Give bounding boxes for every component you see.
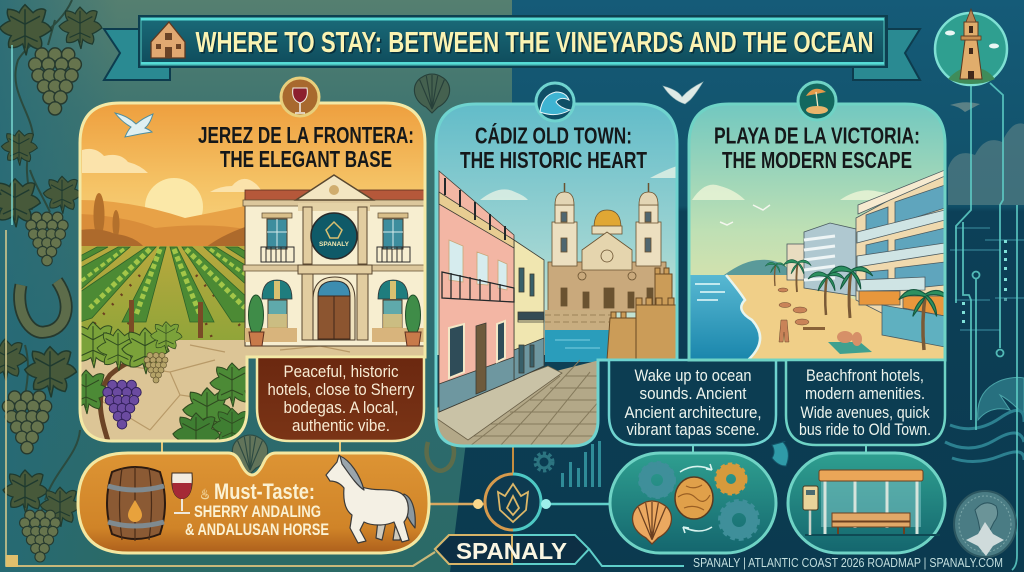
panel: Jerez de la Frontera: [64, 78, 425, 459]
icon: house: [151, 22, 185, 58]
illustration: cathedral and street: [436, 104, 677, 450]
panel: Cadiz Old Town: [436, 83, 776, 450]
text box: bus ride to Old Town.: [799, 420, 931, 439]
brand badge: [413, 535, 684, 566]
hotel building: [243, 175, 425, 346]
beachgoers: [778, 288, 809, 342]
text box: [257, 357, 424, 441]
must-taste text: Must-Taste:: [214, 479, 315, 504]
icon: arrows: [680, 464, 712, 533]
text box: [786, 360, 945, 445]
heading: [714, 122, 920, 173]
icon: beach umbrella: [798, 82, 836, 120]
decorative horseshoe bottom: [427, 442, 454, 471]
panel outline: [436, 104, 677, 446]
heading: [198, 122, 414, 172]
background: ocean side: [450, 0, 1024, 572]
panel outline: [689, 104, 945, 360]
must-taste text: & ANDALUSAN HORSE: [185, 520, 329, 539]
icon: gull: [115, 113, 153, 137]
decorative shell top: [414, 74, 450, 113]
panel outline: [80, 103, 425, 441]
title banner: [104, 15, 920, 80]
cloud band: [948, 123, 1024, 205]
decorative shell bottom: [232, 435, 268, 474]
panel: bus stop: [788, 453, 945, 553]
text box: vibrant tapas scene.: [626, 420, 760, 439]
ribbon tails: [104, 29, 920, 80]
decorative gull top: [663, 82, 703, 104]
illustration: beach and hotels: [689, 104, 951, 360]
icon: horseshoe left: [20, 281, 66, 332]
decorative blue shell: [772, 441, 788, 466]
icon: white horse: [326, 455, 415, 543]
awnings and lower windows: [262, 280, 408, 328]
heading: PLAYA DE LA VICTORIA:: [714, 122, 920, 148]
pink building: [439, 171, 514, 412]
heading: THE ELEGANT BASE: [220, 146, 392, 172]
text box: Beachfront hotels,: [806, 366, 924, 385]
icon: wine glass: [172, 473, 192, 513]
heading: THE MODERN ESCAPE: [722, 147, 912, 173]
icon: bus shelter: [803, 470, 940, 535]
hotel buildings: [787, 170, 945, 347]
text box: Wide avenues, quick: [800, 403, 930, 422]
icon: wine glass: [281, 78, 319, 116]
icon: scallop shell: [633, 501, 671, 544]
panel: old town gears and shell: [610, 453, 776, 553]
cathedral: [548, 183, 666, 312]
heading: CÁDIZ OLD TOWN:: [475, 122, 632, 148]
text box: Wake up to ocean: [634, 366, 752, 385]
emblem sign: [311, 213, 357, 259]
text box: Ancient architecture,: [624, 403, 762, 422]
heading: JEREZ DE LA FRONTERA:: [198, 122, 414, 148]
must-taste text: ♨: [200, 486, 210, 502]
palm trees: [765, 260, 951, 350]
text box: authentic vibe.: [292, 416, 390, 435]
wave: [978, 377, 1024, 420]
icon: sherry barrel: [107, 467, 165, 541]
cream building: [514, 240, 544, 380]
connectors: [162, 440, 866, 504]
paved ground: [80, 340, 425, 445]
text box: modern amenities.: [805, 384, 925, 403]
text box: [609, 360, 776, 445]
ocean decoration right: [945, 83, 1024, 570]
coin: [954, 491, 1016, 557]
panel: must-taste: [78, 453, 429, 553]
vine rows: [80, 247, 250, 338]
brand badge: SPANALY: [456, 538, 567, 564]
decorative vines with grapes: [0, 0, 102, 562]
heading: THE HISTORIC HEART: [460, 147, 647, 173]
must-taste text: [185, 479, 329, 539]
text box: Peaceful, historic: [284, 362, 399, 381]
heading: [460, 122, 647, 173]
panel: Playa de la Victoria: [689, 82, 951, 445]
icon: lighthouse: [935, 9, 1007, 85]
illustration: vineyard and hotel: [82, 104, 424, 440]
icon: sherry-coloured medallion: [675, 477, 713, 519]
emblem sign: SPANALY: [319, 241, 350, 248]
door: [313, 277, 355, 340]
icon: decorative gear: [536, 454, 552, 470]
text box: sounds. Ancient: [640, 384, 747, 403]
icon: gears: [641, 464, 757, 538]
icon: wave: [536, 83, 574, 121]
decorative bar chart: [561, 441, 601, 487]
cobbled street: [436, 360, 600, 446]
text box: hotels, close to Sherry: [268, 380, 415, 399]
left frame line: [6, 45, 435, 567]
vine and grapes: [98, 363, 128, 440]
must-taste text: SHERRY ANDALING: [194, 502, 321, 521]
circuit lines: [956, 83, 1017, 570]
text box: bodegas. A local,: [284, 398, 398, 417]
central emblem: [473, 474, 551, 530]
fortification: [607, 268, 677, 360]
